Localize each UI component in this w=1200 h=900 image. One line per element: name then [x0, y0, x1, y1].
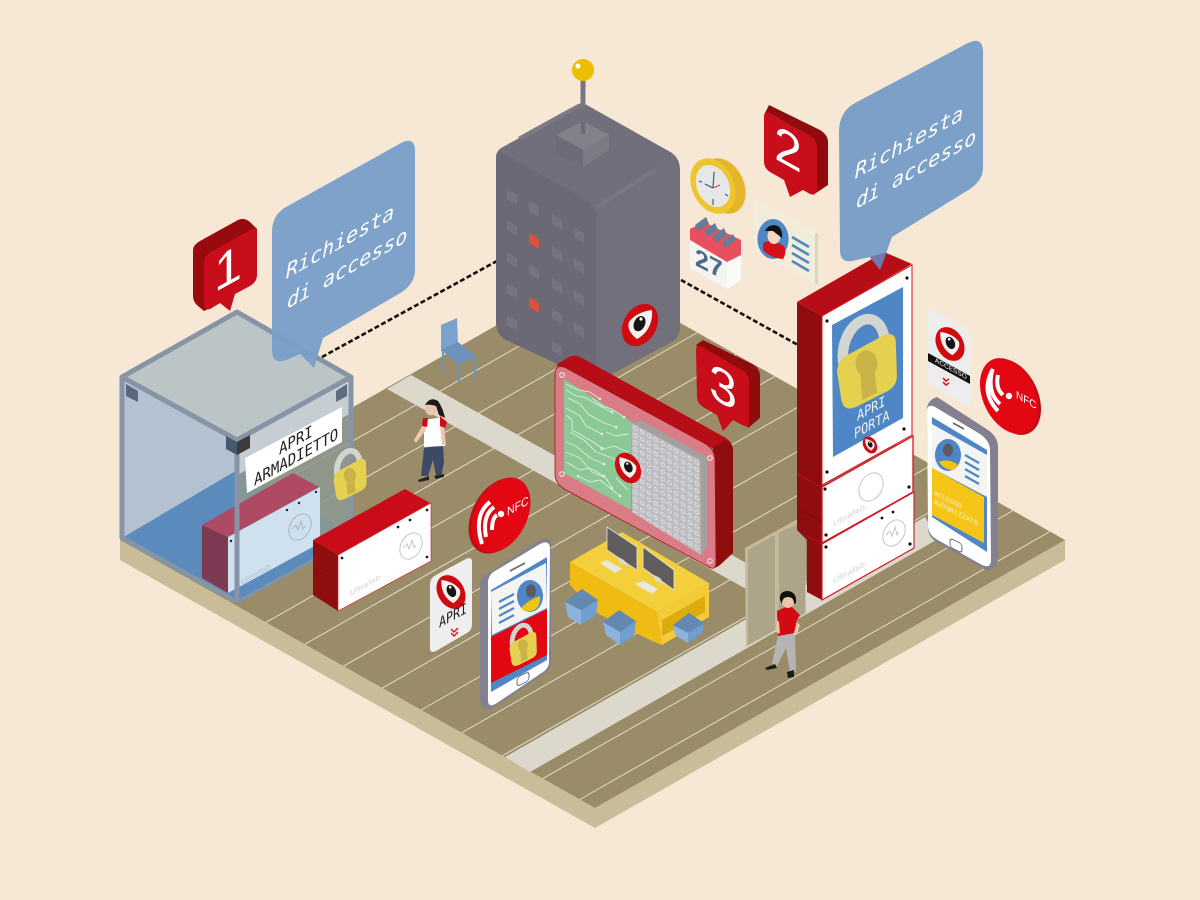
lit windows	[529, 233, 539, 313]
reader device: Ultrafab	[350, 572, 380, 598]
tower eye	[860, 434, 880, 456]
cabinet label	[245, 407, 342, 493]
badge 3	[696, 340, 760, 431]
building top	[503, 103, 672, 205]
roof ridge	[596, 168, 656, 208]
cabinet left glass	[122, 378, 237, 538]
bubble 2	[839, 41, 983, 270]
cabinet label: APRI	[279, 421, 313, 459]
access card	[928, 309, 971, 405]
bubble 1 text: Richiesta	[286, 200, 394, 285]
apri label: APRI	[439, 600, 467, 632]
board with circuit and LED matrix	[555, 356, 733, 568]
dotted connection right	[681, 280, 798, 345]
badge 2	[764, 105, 828, 197]
panel middle: Ultrafab	[833, 502, 865, 529]
walkway back to front	[387, 375, 748, 590]
bubble 1 text: di accesso	[287, 223, 407, 315]
phone right	[927, 397, 998, 571]
windows	[507, 189, 584, 357]
cabinet label: ARMADIETTO	[254, 424, 338, 490]
access label: ACCESSO	[935, 357, 967, 382]
board front	[555, 367, 716, 568]
cabinet device	[202, 473, 320, 593]
apri card	[430, 558, 472, 652]
nfc label left: NFC	[507, 493, 529, 519]
nfc label right: NFC	[1016, 389, 1037, 412]
monitors	[607, 527, 674, 590]
nfc tag right	[969, 349, 1052, 444]
woman walking	[414, 399, 447, 482]
man standing	[765, 591, 800, 678]
building eye logo	[614, 297, 666, 353]
board side right	[712, 440, 733, 568]
antenna	[572, 59, 594, 108]
cabinet back glass	[237, 377, 353, 585]
board eye logo	[610, 448, 646, 488]
building	[496, 59, 680, 382]
floor platform	[120, 272, 1065, 828]
cabinet floor	[120, 470, 353, 602]
stools	[565, 589, 704, 645]
phone left	[480, 538, 551, 710]
cabinet top	[120, 312, 353, 440]
bubble 2 text: Richiesta	[855, 101, 963, 185]
board screws	[560, 373, 712, 563]
door	[745, 515, 806, 647]
cabinet device: Ultrafab	[241, 561, 271, 587]
panel bottom: Ultrafab	[833, 559, 865, 586]
keyboards	[600, 560, 658, 594]
tower top	[797, 252, 912, 316]
clock	[682, 151, 754, 221]
chevrons	[943, 378, 949, 385]
phone right text: AUTORIZZATO	[934, 498, 978, 528]
reader device	[313, 489, 431, 611]
tower reader	[797, 252, 914, 600]
badge 1	[193, 219, 257, 311]
number 3: 3	[709, 352, 737, 423]
cabinet frame	[122, 312, 351, 602]
id card	[754, 198, 818, 285]
apri porta text: PORTA	[854, 407, 890, 443]
board side top	[556, 356, 732, 449]
panel bottom	[822, 492, 914, 600]
nfc tag left	[457, 468, 542, 563]
dotted connection left	[322, 261, 497, 357]
bubble 2 text: di accesso	[856, 125, 976, 215]
desk	[570, 527, 709, 645]
cabinet corners	[126, 384, 347, 455]
tower side	[797, 302, 822, 600]
led matrix	[632, 420, 707, 555]
phone right text: ACCESSO	[934, 489, 962, 511]
tower panel top	[822, 265, 912, 485]
number 2: 2	[774, 114, 802, 185]
chair	[441, 318, 476, 384]
number 1: 1	[214, 233, 242, 304]
roof box	[556, 121, 609, 167]
calendar date: 27	[695, 242, 723, 285]
tower panel blue	[832, 287, 903, 457]
building left face	[496, 152, 596, 382]
calendar	[690, 217, 741, 289]
panel middle	[822, 436, 913, 543]
walkway lower	[505, 517, 938, 772]
bubble 1	[272, 141, 415, 368]
apri porta text: APRI	[857, 393, 885, 425]
screws	[823, 276, 912, 549]
circuit area	[564, 379, 632, 510]
small padlock	[334, 451, 367, 500]
glass cabinet	[120, 312, 353, 602]
big padlock	[837, 319, 897, 408]
